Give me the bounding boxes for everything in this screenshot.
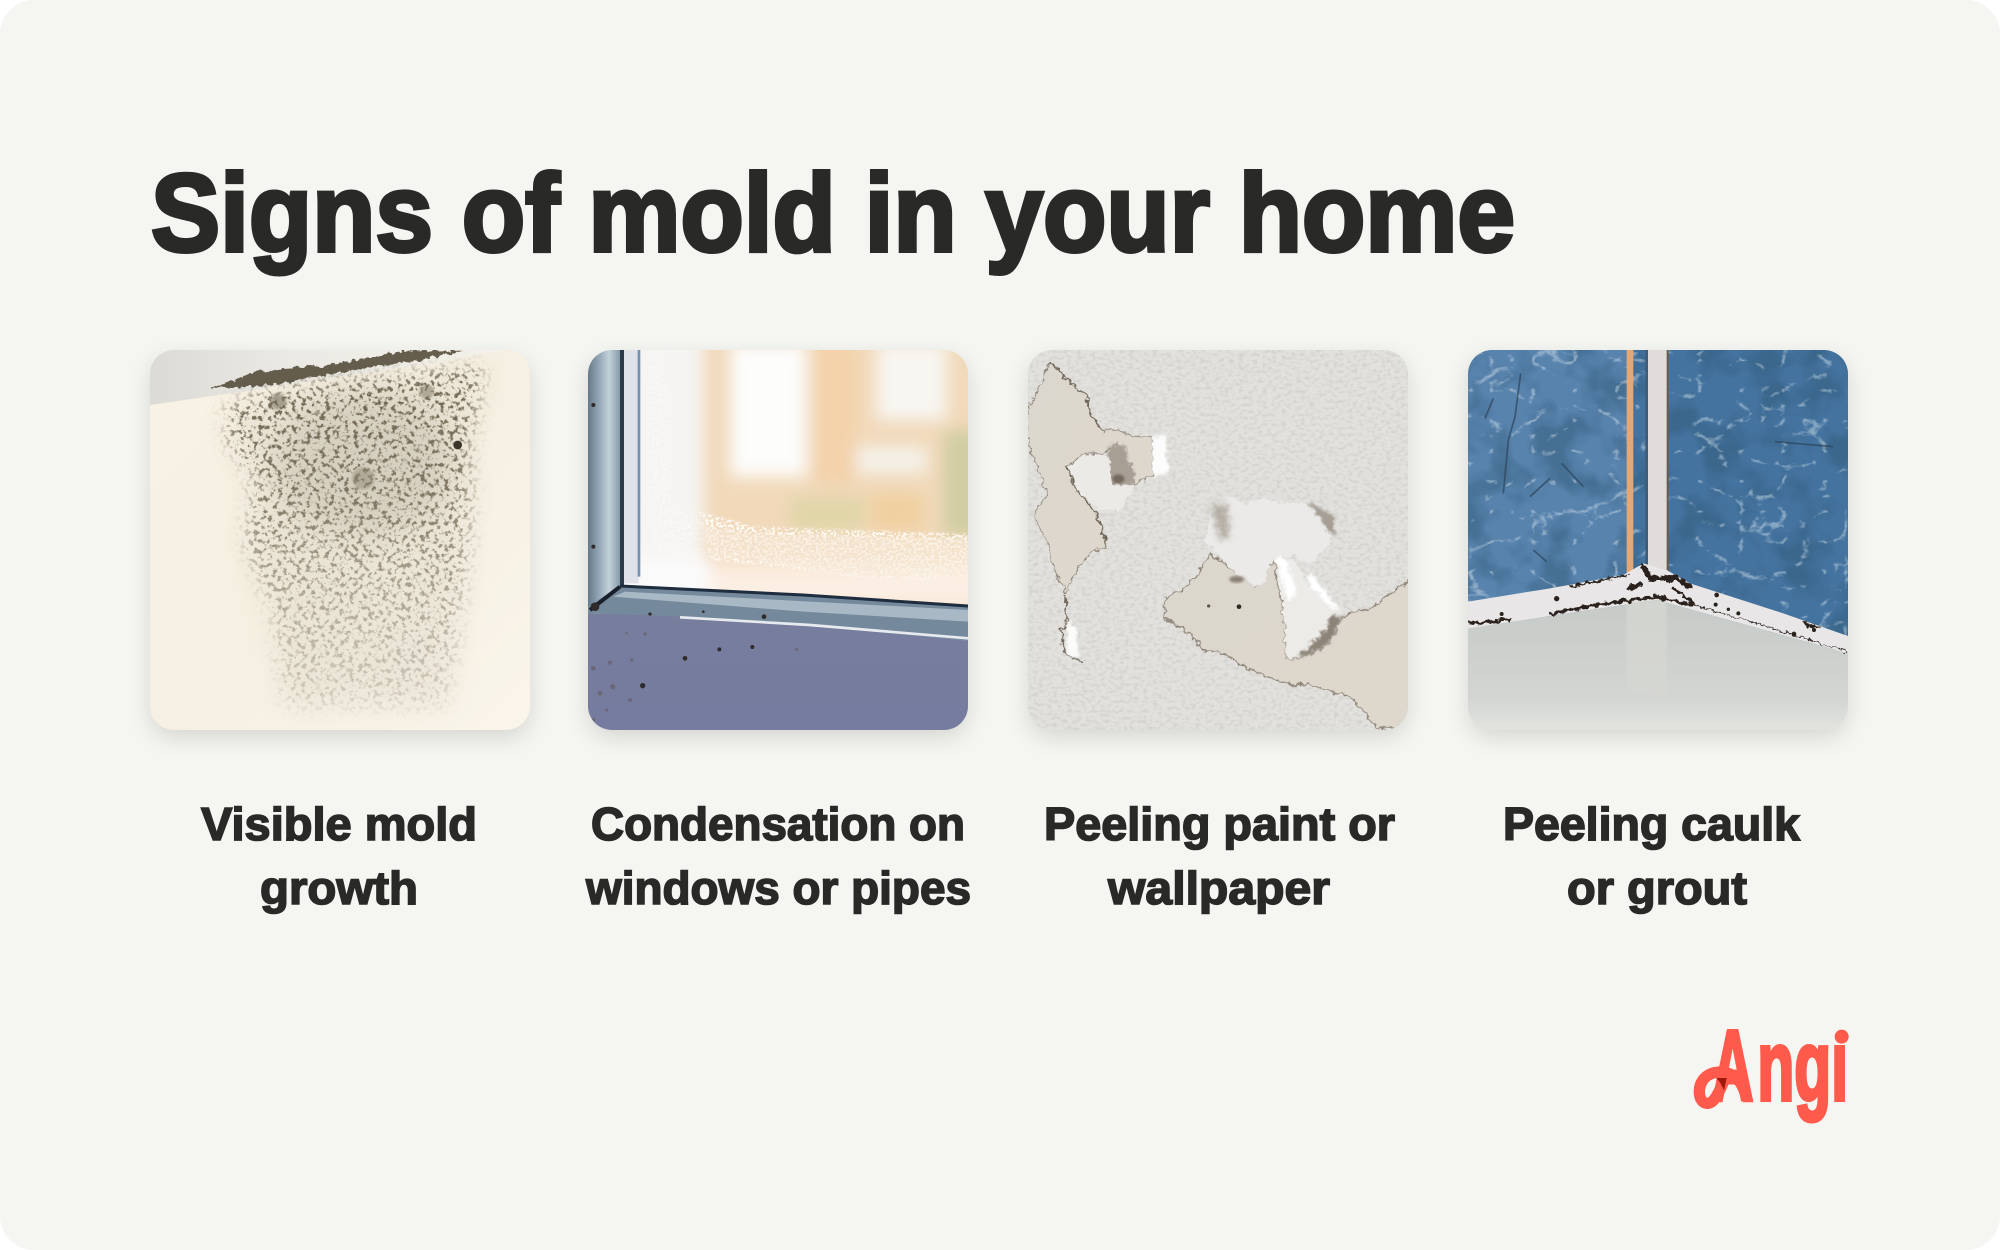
label: peeling caulk: Peeling caulk	[1503, 798, 1800, 850]
label: peeling paint	[1044, 798, 1395, 914]
label: peeling caulk: or grout	[1567, 862, 1747, 914]
panel: visible mold growth	[150, 350, 530, 738]
card shadow	[1028, 358, 1408, 738]
panel: peeling caulk	[1468, 350, 1848, 738]
title: Signs of mold in your home	[151, 152, 1515, 275]
card shadow	[150, 358, 530, 738]
logo: Angi	[1699, 1010, 1852, 1122]
label: visible mold growth	[201, 798, 477, 914]
photo: mold on wall	[150, 350, 530, 730]
label: peeling caulk	[1503, 798, 1800, 914]
logo: Angi: ngi	[1757, 1010, 1848, 1122]
label: condensation: windows or pipes	[585, 862, 971, 914]
label: peeling paint: Peeling paint or	[1044, 798, 1395, 850]
label: condensation: Condensation on	[591, 798, 965, 850]
logo: Angi: A	[1712, 1010, 1753, 1122]
label: condensation	[585, 798, 971, 914]
photo: peeling paint	[1028, 350, 1413, 730]
label: visible mold growth: Visible mold	[201, 798, 477, 850]
photo: window condensation	[588, 350, 968, 730]
card shadow	[1468, 358, 1848, 738]
panel: peeling paint	[1028, 350, 1413, 738]
card shadow	[588, 358, 968, 738]
label: visible mold growth: growth	[260, 862, 418, 914]
panel: condensation	[581, 350, 975, 745]
label: peeling paint: wallpaper	[1107, 862, 1330, 914]
photo: caulk and tile	[1468, 350, 1848, 730]
